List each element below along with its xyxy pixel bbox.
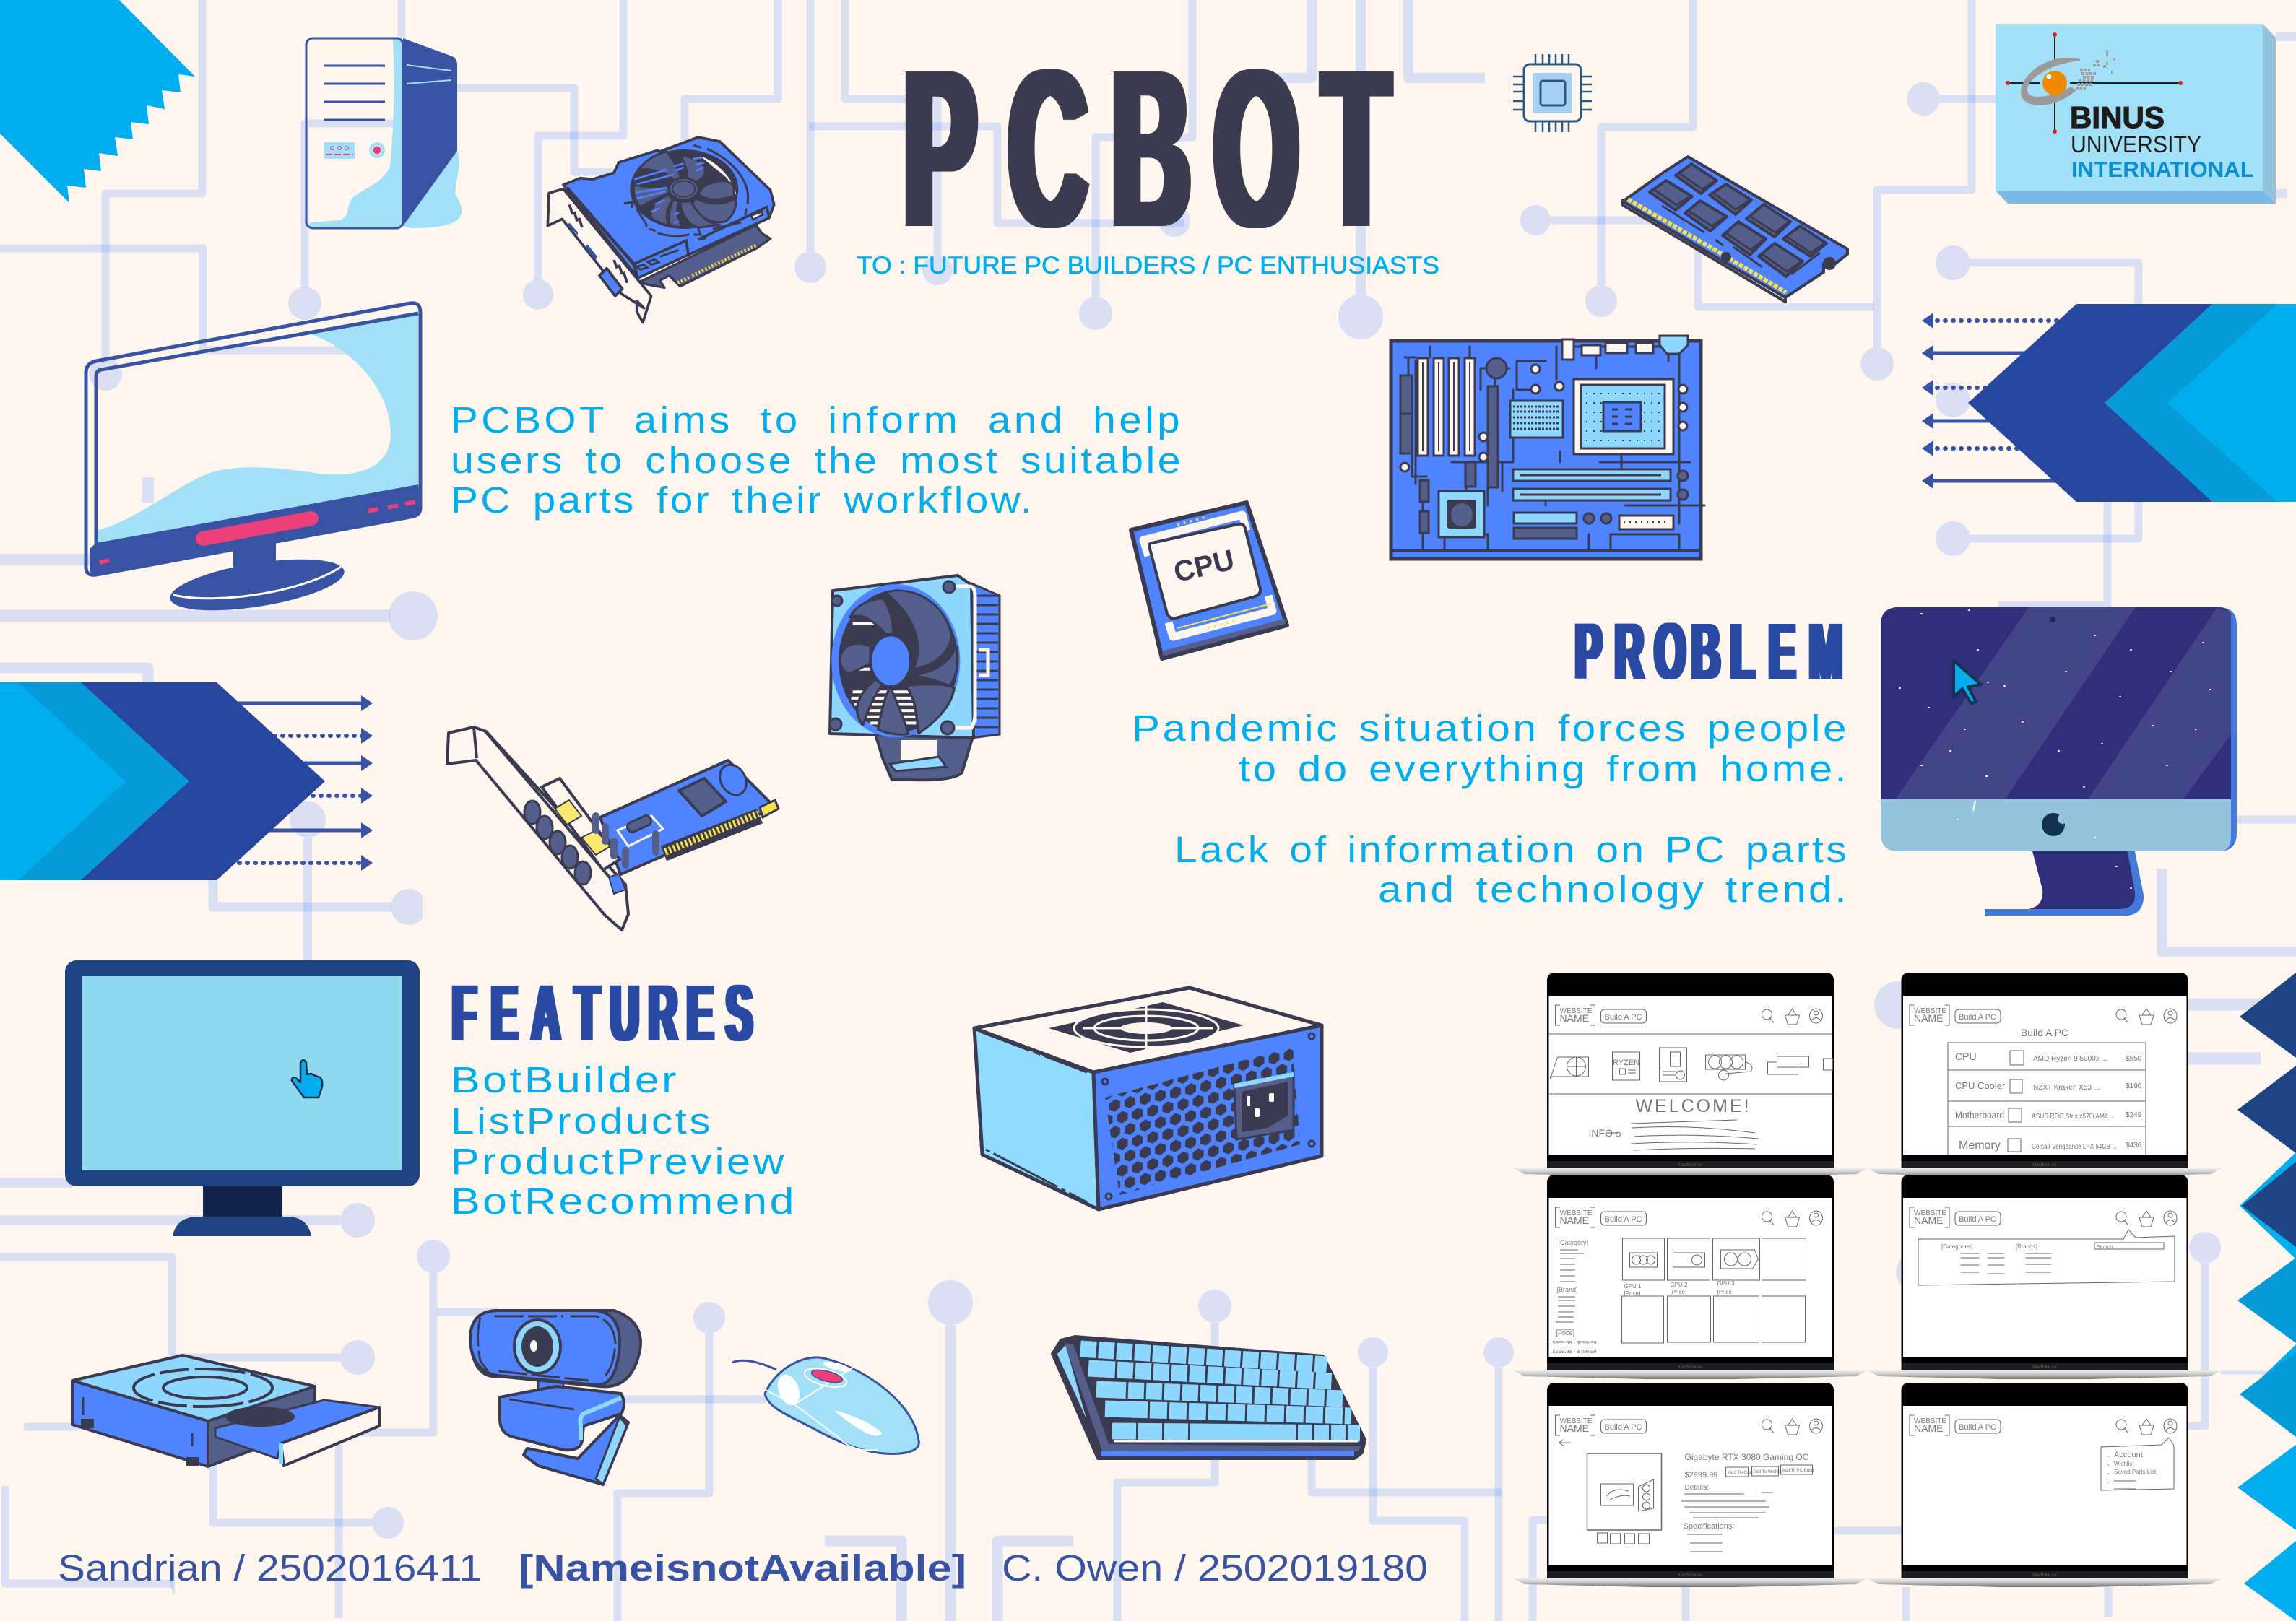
problem text: to do everything from home. xyxy=(1239,748,1849,789)
laptop: build a pc wireframe xyxy=(1868,973,2222,1177)
wireframe header xyxy=(1910,1005,2177,1025)
arrows: right chevron xyxy=(1922,313,2066,489)
icon: microchip xyxy=(1513,54,1592,132)
icon: keyboard xyxy=(1052,1337,1365,1459)
icon: widescreen monitor xyxy=(86,303,420,620)
wireframe content: filters and grid xyxy=(1553,1238,1806,1355)
laptop: product detail wireframe xyxy=(1514,1383,1868,1587)
laptop: product list wireframe: MacBook Air xyxy=(1678,1365,1702,1370)
problem heading: PROBLEM xyxy=(1575,607,1842,696)
wireframe content: filters and grid: [Price] xyxy=(1624,1290,1640,1297)
wireframe header: WEBSITE xyxy=(1560,1007,1593,1015)
top-left serrated banner xyxy=(0,0,195,203)
wireframe content: filters and grid: [Price] xyxy=(1717,1289,1733,1295)
wireframe content: parts table: $190 xyxy=(2126,1082,2142,1090)
cooler fan xyxy=(831,584,960,737)
features list xyxy=(451,1059,797,1222)
wireframe header xyxy=(1556,1207,1823,1227)
card fan xyxy=(631,150,737,228)
subtitle: audience: TO : FUTURE PC BUILDERS / PC ENTHUSIASTS xyxy=(857,252,1439,279)
logo block: BINUS University International: BINUS xyxy=(2070,100,2165,134)
wireframe header xyxy=(1910,1207,2177,1227)
problem text: and technology trend. xyxy=(1378,869,1849,910)
laptop: product detail wireframe: MacBook Air xyxy=(1678,1573,1702,1578)
wireframe content: parts table: AMD Ryzen 9 5900x ... xyxy=(2033,1055,2107,1063)
left chevron with arrows xyxy=(0,682,373,880)
wireframe content: search panel xyxy=(1918,1230,2175,1285)
problem text: Pandemic situation forces people xyxy=(1132,708,1849,749)
wireframe content: product details: Details: xyxy=(1684,1484,1709,1492)
wireframe header: NAME xyxy=(1560,1422,1589,1434)
wireframe content: parts table: NZXT Kraken X53 ... xyxy=(2033,1084,2100,1092)
wireframe content: account bubble xyxy=(2101,1438,2174,1490)
card shroud xyxy=(563,137,774,278)
wireframe content: parts table: ASUS ROG Strix x570i AM4 ... xyxy=(2032,1113,2115,1121)
laptop: account menu wireframe: MacBook Air xyxy=(2032,1573,2057,1578)
footer: team members: C. Owen / 2502019180 xyxy=(1002,1547,1428,1589)
wireframe header: WEBSITE xyxy=(1560,1209,1593,1217)
laptop: home page wireframe xyxy=(1514,973,1868,1177)
wireframe content: account bubble: Account xyxy=(2114,1451,2143,1459)
icon: pc tower xyxy=(306,38,462,228)
features list: BotRecommend xyxy=(451,1181,797,1222)
wireframe header: NAME xyxy=(1914,1012,1943,1024)
laptop: product list wireframe xyxy=(1514,1175,1868,1379)
footer: team members xyxy=(58,1547,1428,1589)
wireframe content: filters and grid: [Category] xyxy=(1559,1239,1588,1246)
wireframe header: WEBSITE xyxy=(1914,1417,1946,1425)
wireframe content: filters and grid: [Price] xyxy=(1556,1329,1574,1337)
wireframe content: search panel: [Categories] xyxy=(1941,1243,1972,1250)
wireframe content: search panel: Search xyxy=(2097,1245,2113,1250)
wireframe content: parts table xyxy=(1948,1027,2146,1155)
wireframe content: products and welcome xyxy=(1548,1034,1833,1150)
intro paragraph: PC parts for their workflow. xyxy=(451,479,1034,521)
wireframe content: parts table: $550 xyxy=(2126,1055,2142,1063)
features list: ListProducts xyxy=(451,1100,713,1142)
intro paragraph: users to choose the most suitable xyxy=(451,440,1183,481)
wireframe content: account bubble: Wishlist xyxy=(2114,1461,2134,1467)
right chevron with arrows xyxy=(1922,304,2296,502)
icon: hand cursor xyxy=(292,1060,322,1098)
wireframe header: NAME xyxy=(1560,1214,1589,1226)
laptop: account menu wireframe xyxy=(1868,1383,2222,1587)
wireframe content: filters and grid: GPU 2 xyxy=(1670,1282,1688,1288)
wireframe content: filters and grid: GPU 3 xyxy=(1717,1280,1735,1287)
logo block: BINUS University International xyxy=(1996,24,2276,204)
icon: optical drive xyxy=(72,1355,379,1466)
icon: motherboard xyxy=(1391,336,1704,559)
features list: ProductPreview xyxy=(451,1141,787,1182)
icon: webcam xyxy=(470,1311,641,1485)
card bracket xyxy=(547,189,651,323)
wireframe header: Build A PC xyxy=(1959,1215,1996,1224)
wireframe header xyxy=(1910,1415,2177,1435)
icon: all-in-one desktop xyxy=(1881,607,2237,916)
icon: flat monitor with hand cursor xyxy=(65,960,420,1236)
icon: graphics card xyxy=(547,137,774,323)
icon: cpu processor: CPU xyxy=(1171,544,1237,588)
wireframe content: product details xyxy=(1559,1440,1814,1552)
wireframe header: WEBSITE xyxy=(1914,1209,1946,1217)
wireframe content: parts table: Memory xyxy=(1959,1139,2001,1152)
icon: sound card xyxy=(447,727,779,930)
wireframe header: NAME xyxy=(1914,1422,1943,1434)
wireframe content: filters and grid: $399.99 - $599.99 xyxy=(1553,1339,1596,1346)
icon: ram module xyxy=(1623,157,1847,302)
wireframe content: search panel: [Brands] xyxy=(2016,1243,2037,1250)
wireframe content: product details: $2999.99 xyxy=(1684,1471,1717,1479)
wireframe header: WEBSITE xyxy=(1560,1417,1593,1425)
wireframe content: parts table: Build A PC xyxy=(2021,1027,2068,1038)
icon: computer mouse xyxy=(732,1357,919,1453)
laptop: search dropdown wireframe xyxy=(1868,1175,2222,1379)
wireframe content: product details: Specifications: xyxy=(1683,1522,1734,1531)
laptop: search dropdown wireframe: MacBook Air xyxy=(2032,1365,2057,1370)
wireframe header: WEBSITE xyxy=(1914,1007,1946,1015)
logo block: BINUS University International: UNIVERSITY xyxy=(2071,131,2201,157)
arrows: left chevron xyxy=(231,695,373,871)
problem text: Lack of information on PC parts xyxy=(1174,829,1849,870)
wireframe content: parts table: CPU xyxy=(1955,1051,1977,1062)
wireframe content: parts table: Corsair Vengeance LPX 64GB ... xyxy=(2032,1143,2117,1151)
wireframe content: products and welcome: INFO xyxy=(1589,1127,1613,1139)
wireframe content: filters and grid: GPU 1 xyxy=(1624,1283,1642,1290)
wireframe content: products and welcome: WELCOME! xyxy=(1635,1096,1751,1116)
wireframe content: products and welcome: RYZEN xyxy=(1613,1059,1639,1067)
wireframe content: product details: Add To Wishlist xyxy=(1754,1470,1783,1474)
right-edge triangle column xyxy=(2237,973,2296,1621)
intro paragraph xyxy=(451,399,1183,521)
wireframe header: Build A PC xyxy=(1959,1013,1996,1022)
wireframe content: account bubble: Saved Parts List xyxy=(2114,1469,2157,1475)
wireframe header: NAME xyxy=(1914,1214,1943,1226)
wireframe header: Build A PC xyxy=(1959,1423,1996,1432)
icon: cpu processor xyxy=(1131,503,1287,659)
icon: power supply unit xyxy=(974,988,1322,1209)
wireframe header: Build A PC xyxy=(1605,1215,1642,1224)
laptop: home page wireframe: MacBook Air xyxy=(1678,1163,1702,1168)
wireframe content: parts table: Motherboard xyxy=(1955,1109,2004,1121)
wireframe content: product details: Gigabyte RTX 3080 Gaming OC xyxy=(1684,1452,1809,1462)
wireframe content: product details: Add To Cart xyxy=(1728,1470,1753,1475)
wireframe content: product details: Add To PC Build xyxy=(1782,1469,1814,1473)
wireframe header: Build A PC xyxy=(1605,1423,1642,1432)
wireframe header: Build A PC xyxy=(1605,1013,1642,1022)
wireframe content: filters and grid: [Price] xyxy=(1670,1289,1686,1295)
wireframe header xyxy=(1556,1415,1823,1435)
wireframe content: filters and grid: $599.99 - $799.99 xyxy=(1553,1348,1596,1355)
laptop: build a pc wireframe: MacBook Air xyxy=(2032,1163,2057,1168)
wireframe content: parts table: $436 xyxy=(2126,1142,2142,1150)
icon: cpu cooler xyxy=(830,575,1000,780)
wireframe header xyxy=(1556,1005,1823,1025)
footer: team members: Sandrian / 2502016411 xyxy=(58,1547,482,1589)
wireframe content: parts table: CPU Cooler xyxy=(1955,1080,2006,1091)
problem text xyxy=(1132,708,1849,910)
title: PCBOT xyxy=(904,22,1389,274)
card pcb xyxy=(641,225,771,287)
wireframe header: NAME xyxy=(1560,1012,1589,1024)
features heading: FEATURES xyxy=(452,969,753,1058)
wireframe content: filters and grid: [Brand] xyxy=(1557,1286,1578,1293)
footer: team members: [NameisnotAvailable] xyxy=(519,1547,966,1589)
features list: BotBuilder xyxy=(451,1059,679,1100)
wireframe content: parts table: $249 xyxy=(2126,1111,2142,1119)
logo block: BINUS University International: INTERNATIONAL xyxy=(2071,157,2254,182)
intro paragraph: PCBOT aims to inform and help xyxy=(451,399,1183,440)
